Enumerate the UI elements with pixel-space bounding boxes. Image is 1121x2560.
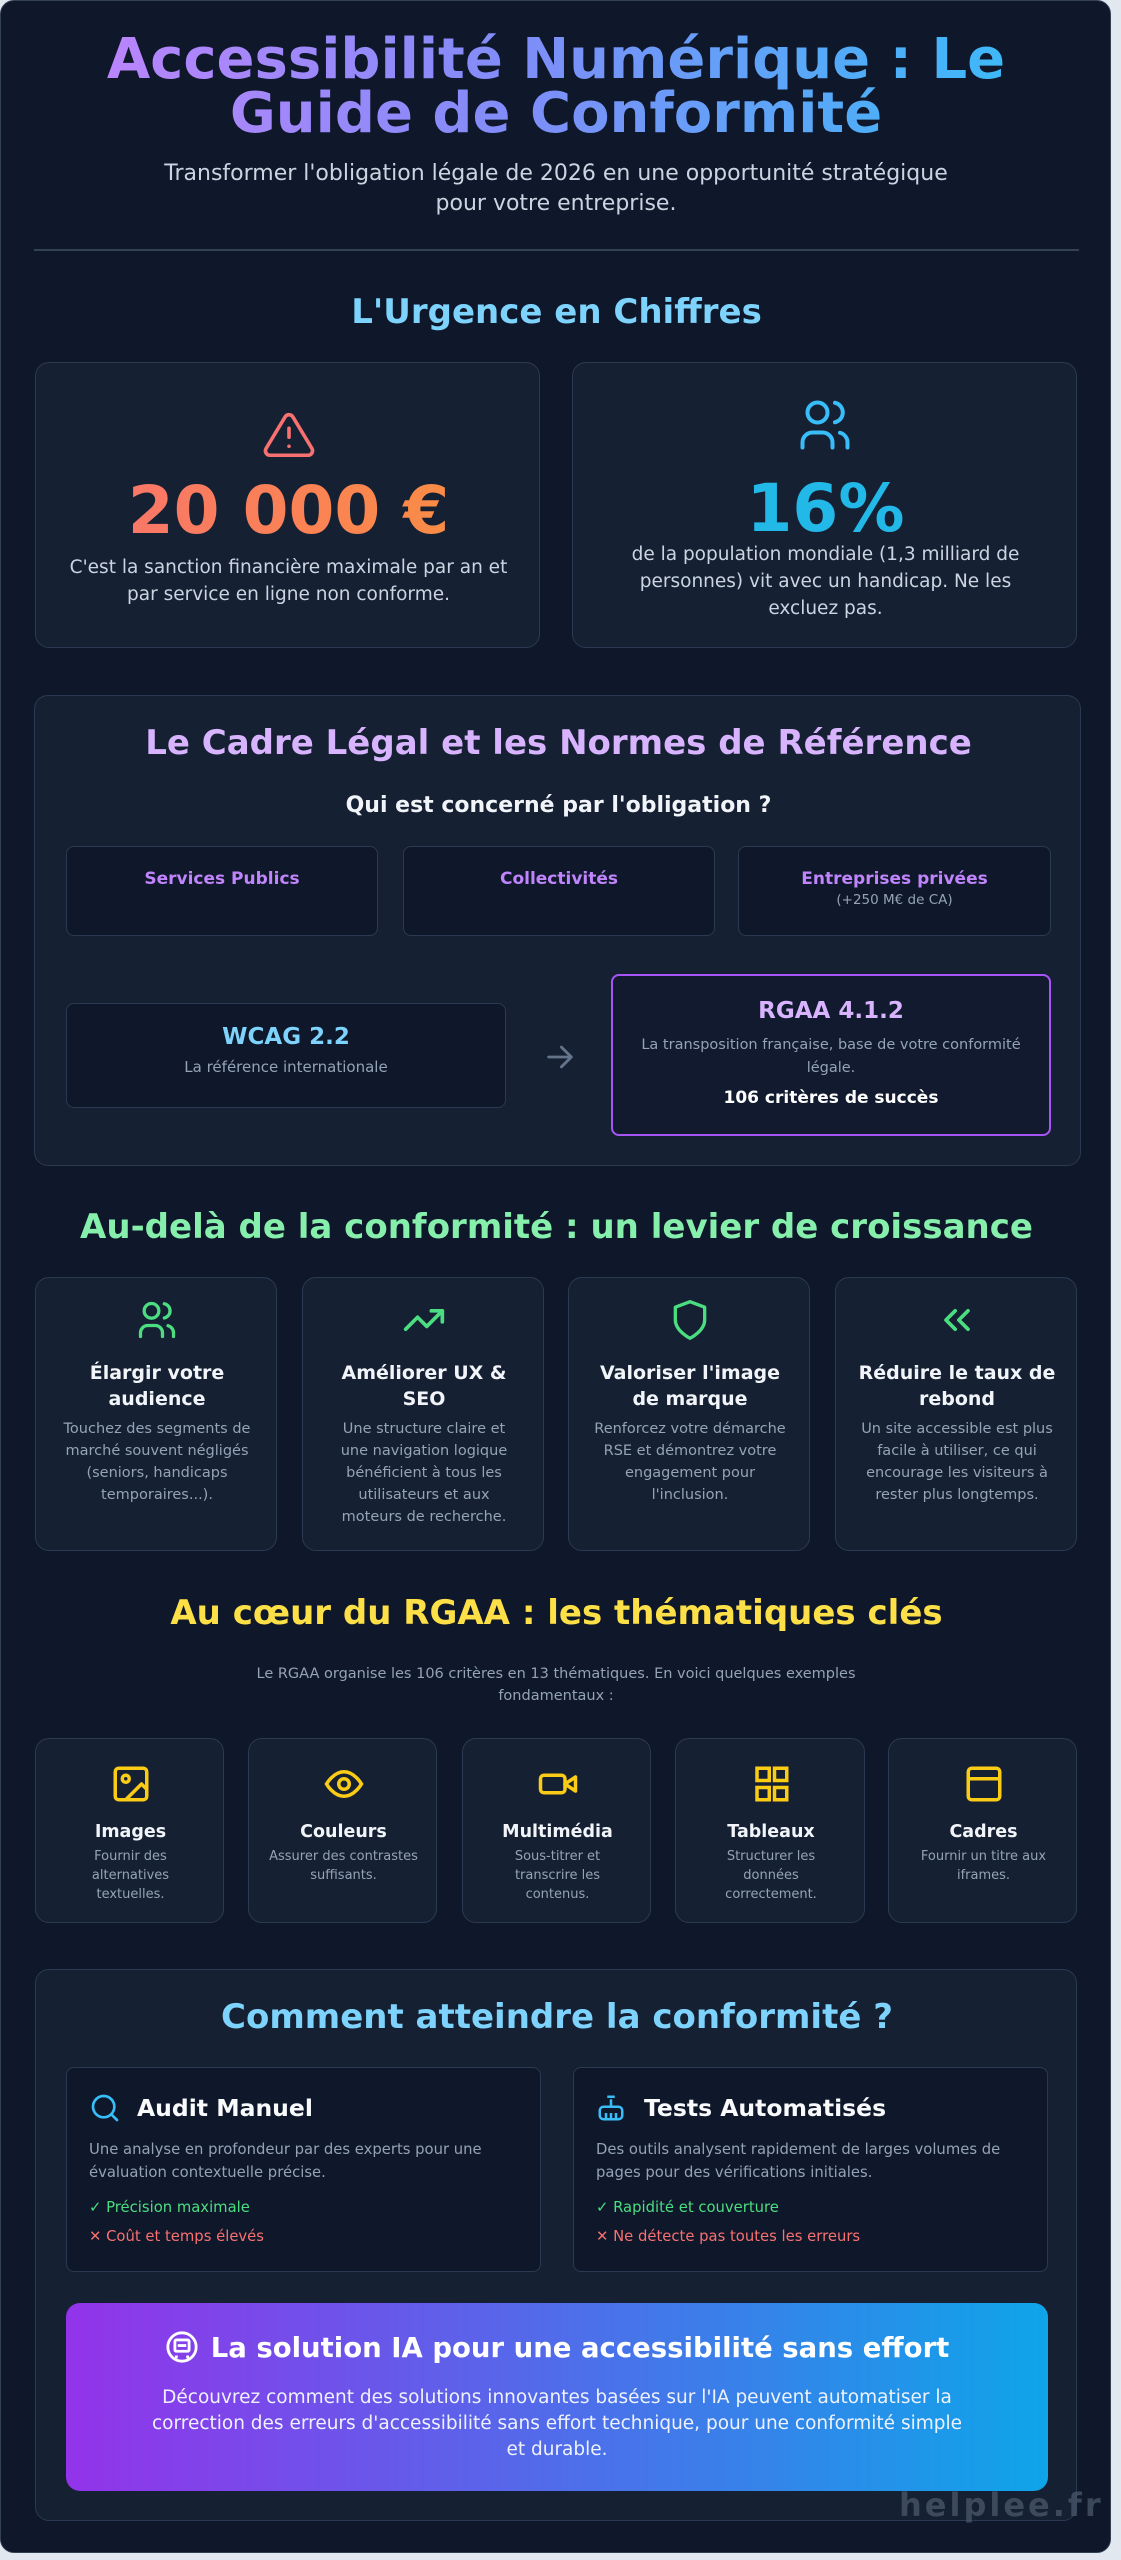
icon <box>138 1302 176 1338</box>
benefit card: rebond: Réduire le taux de rebond <box>859 1362 1055 1410</box>
benefit card: rebond: Un site accessible est plus facile à utiliser, ce qui encourage les visiteurs à rester plus longtemps. <box>861 1421 1053 1503</box>
theme card: tableaux <box>675 1738 865 1923</box>
heading: Comment atteindre la conformité ? <box>221 1997 893 2037</box>
method card: tests <box>573 2067 1048 2272</box>
method card: tests: Des outils analysent rapidement de larges volumes de pages pour des vérifications initiales. <box>596 2141 1000 2181</box>
method card: audit: Une analyse en profondeur par des experts pour une évaluation contextuelle précise. <box>89 2141 482 2181</box>
text: C'est la sanction financière maximale par an et par service en ligne non conforme. <box>70 557 507 605</box>
heading: croissance: Au-delà de la conformité : un levier de croissance <box>80 1207 1033 1247</box>
theme card: couleurs: Couleurs <box>300 1822 387 1842</box>
box: services publics <box>66 846 378 936</box>
theme card: couleurs: Assurer des contrastes suffisants. <box>269 1849 418 1883</box>
stat card: sanction <box>35 362 540 648</box>
number: 16% <box>746 470 904 547</box>
box: WCAG: WCAG 2.2 <box>222 1024 350 1050</box>
icon <box>404 1308 444 1332</box>
box: WCAG: La référence internationale <box>184 1058 388 1076</box>
heading: urgence: L'Urgence en Chiffres <box>351 292 762 332</box>
icon <box>324 1770 364 1798</box>
theme card: cadres: Fournir un titre aux iframes. <box>921 1849 1046 1883</box>
callout title with icon: La solution IA pour une accessibilité sans effort <box>211 2332 949 2364</box>
watermark: helplee.fr <box>899 2486 1104 2524</box>
heading: Le Cadre Légal et les Normes de Référence <box>145 723 972 763</box>
heading: RGAA: Au cœur du RGAA : les thématiques clés <box>170 1593 943 1633</box>
number <box>36 471 541 551</box>
theme card: couleurs <box>248 1738 437 1923</box>
intro text: Le RGAA organise les 106 critères en 13 thématiques. En voici quelques exemples fondamentaux : <box>256 1666 856 1704</box>
method card: audit: Audit Manuel <box>137 2094 313 2122</box>
stat card: population <box>572 362 1077 648</box>
theme card: multimédia: Sous-titrer et transcrire les contenus. <box>515 1849 600 1902</box>
icon: warning <box>264 412 314 457</box>
benefit card: UX SEO <box>302 1277 544 1551</box>
method card: audit: ✕ Coût et temps élevés <box>89 2228 264 2245</box>
icon: robot <box>598 2096 624 2120</box>
panel: comment atteindre <box>35 1969 1077 2521</box>
box: RGAA <box>611 974 1051 1136</box>
benefit card: audience: Élargir votre audience <box>90 1362 224 1410</box>
method card: tests: ✓ Rapidité et couverture <box>596 2199 779 2216</box>
icon <box>674 1300 706 1340</box>
icon: users <box>800 400 850 450</box>
icon <box>944 1308 970 1332</box>
theme card: multimédia: Multimédia <box>502 1822 613 1842</box>
icon <box>114 1766 148 1802</box>
method card: audit <box>66 2067 541 2272</box>
benefit card: image: Renforcez votre démarche RSE et démontrez votre engagement pour l'inclusion. <box>594 1421 786 1503</box>
box: entreprises <box>738 846 1051 936</box>
icon: search <box>92 2094 118 2122</box>
subheading: Qui est concerné par l'obligation ? <box>346 793 771 818</box>
theme card: tableaux: Tableaux <box>727 1822 815 1842</box>
text: de la population mondiale (1,3 milliard de personnes) vit avec un handicap. Ne les excluez pas. <box>632 544 1019 619</box>
callout: solution IA <box>66 2303 1048 2491</box>
callout: solution IA: Découvrez comment des solutions innovantes basées sur l'IA peuvent automatiser la correction des erreurs d'accessibilité sans effort technique, pour une conformité simple et durable. <box>152 2387 962 2460</box>
title: Accessibilité Numérique : Le Guide de Conformité <box>107 27 1005 146</box>
benefit card: UX SEO: Améliorer UX & SEO <box>342 1362 506 1410</box>
benefit card: UX SEO: Une structure claire et une navigation logique bénéficient à tous les utilisateurs et aux moteurs de recherche. <box>341 1421 507 1525</box>
box: entreprises: Entreprises privées <box>801 869 988 889</box>
benefit card: audience <box>35 1277 277 1551</box>
theme card: images: Fournir des alternatives textuelles. <box>92 1849 169 1902</box>
icon <box>538 1774 578 1794</box>
icon <box>755 1766 788 1802</box>
box: services publics: Services Publics <box>144 869 300 889</box>
box: collectivités: Collectivités <box>500 869 618 889</box>
box: RGAA: La transposition française, base de votre conformité légale. <box>641 1037 1021 1076</box>
method card: audit: ✓ Précision maximale <box>89 2199 250 2216</box>
panel: cadre légal <box>34 695 1081 1166</box>
box: WCAG <box>66 1003 506 1108</box>
benefit card: image: Valoriser l'image de marque <box>600 1362 780 1410</box>
arrow <box>547 1046 573 1068</box>
benefit card: image <box>568 1277 810 1551</box>
theme card: cadres: Cadres <box>949 1822 1018 1842</box>
box: RGAA: RGAA 4.1.2 <box>758 998 904 1024</box>
theme card: tableaux: Structurer les données correctement. <box>725 1849 817 1902</box>
box: entreprises: (+250 M€ de CA) <box>836 892 953 908</box>
benefit card: audience: Touchez des segments de marché souvent négligés (seniors, handicaps temporaires...). <box>64 1421 250 1503</box>
theme card: images: Images <box>95 1822 166 1842</box>
box: RGAA: 106 critères de succès <box>724 1088 938 1108</box>
theme card: cadres <box>888 1738 1077 1923</box>
subtitle: Transformer l'obligation légale de 2026 en une opportunité stratégique pour votre entreprise. <box>164 161 948 216</box>
icon <box>966 1766 1002 1802</box>
method card: tests: Tests Automatisés <box>644 2094 886 2122</box>
benefit card: rebond <box>835 1277 1077 1551</box>
theme card: images <box>35 1738 224 1923</box>
box: collectivités <box>403 846 715 936</box>
theme card: multimédia <box>462 1738 651 1923</box>
method card: tests: ✕ Ne détecte pas toutes les erreurs <box>596 2228 860 2245</box>
